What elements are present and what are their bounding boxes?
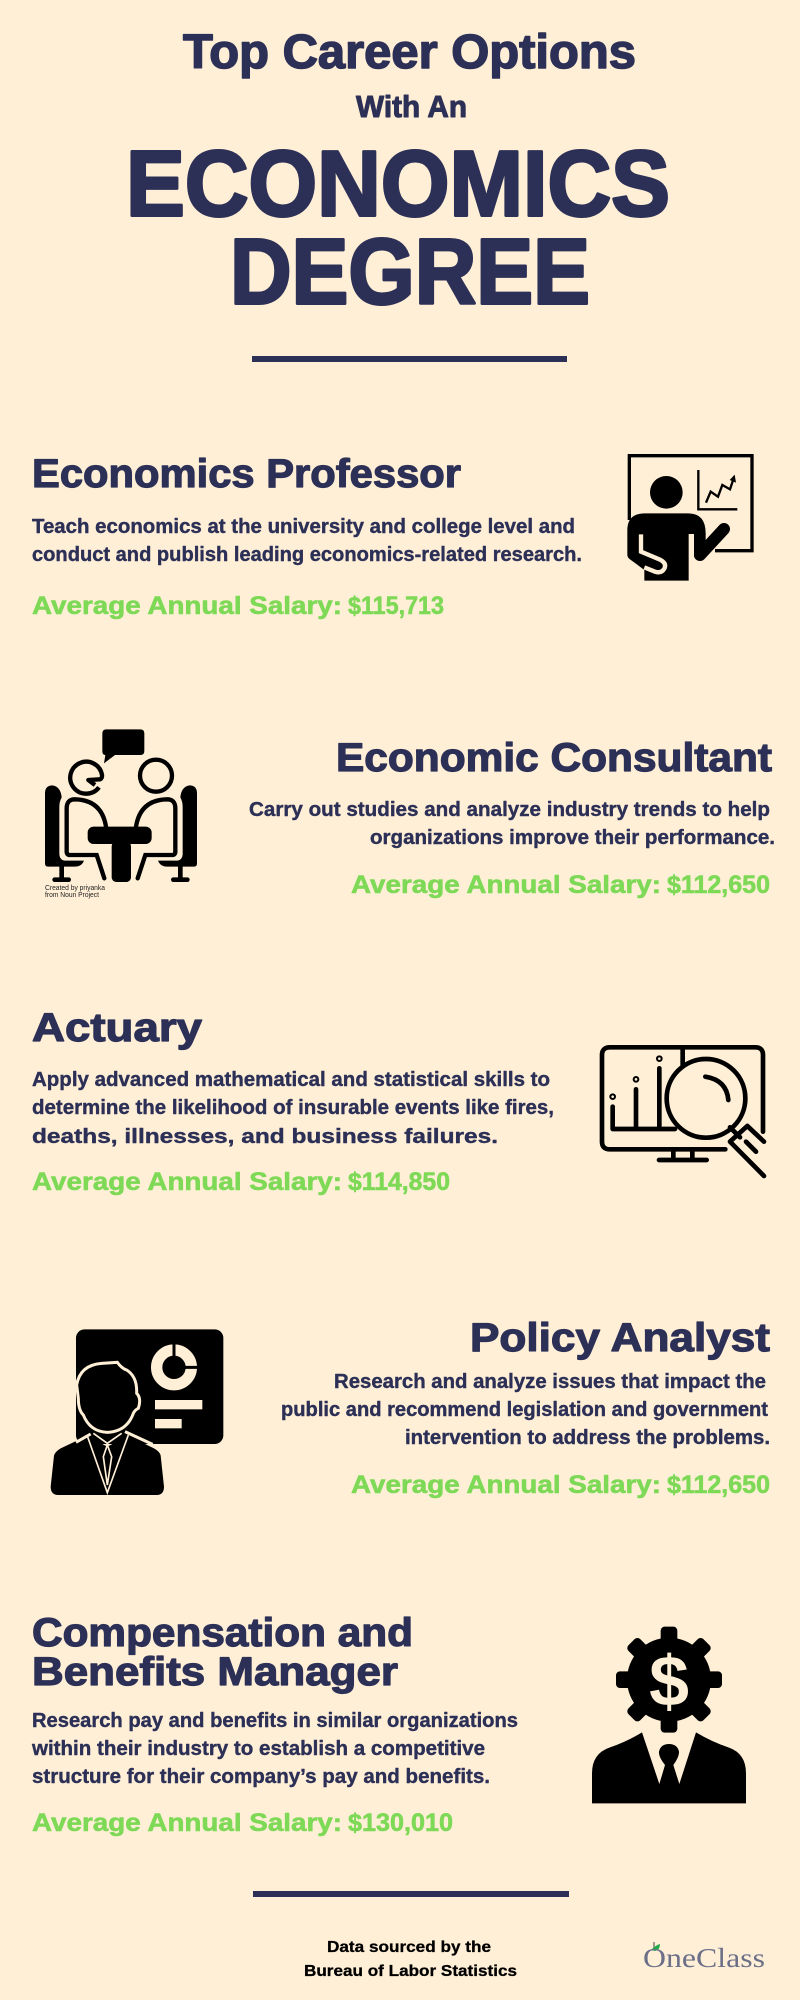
panel: Policy Analyst [51,1316,770,1499]
description: determine the likelihood of insurable events like fires, [32,1097,554,1119]
description: within their industry to establish a competitive [31,1738,485,1760]
panel: Economics Professor [32,452,752,620]
salary [32,1168,450,1196]
title line: ECONOMICS: ECONOMICS [126,132,670,236]
description: conduct and publish leading economics-related research. [32,544,582,566]
panel: Compensation and Benefits Manager [31,1611,746,1837]
heading: Economics Professor [32,452,461,496]
icon: manager with dollar gear head [592,1627,746,1803]
description: structure for their company’s pay and benefits. [32,1766,490,1788]
title line: DEGREE: DEGREE [230,220,590,324]
description [281,1371,770,1449]
title line: With An: With An [356,89,467,124]
heading: Benefits Manager [32,1650,398,1694]
panel: Economic Consultant [45,729,775,899]
salary: $112,650 [667,1471,770,1499]
icon credit: Created by priyanka [45,885,105,892]
description: organizations improve their performance. [370,827,775,849]
salary [32,592,444,620]
title line: Top Career Options: Top Career Options [183,26,636,79]
description: Teach economics at the university and college level and [32,516,575,538]
description: public and recommend legislation and government [281,1399,768,1421]
salary: $130,010 [348,1809,453,1837]
description [32,516,582,566]
salary: Average Annual Salary: [32,1809,342,1837]
icon: two people meeting at a table [45,729,197,882]
panel: Actuary [32,1006,764,1196]
heading: Policy Analyst [470,1316,770,1360]
description: Apply advanced mathematical and statistical skills to [32,1069,550,1091]
heading: Compensation and [32,1611,413,1655]
icon credit: from Noun Project [45,892,99,899]
salary: Average Annual Salary: [351,1471,661,1499]
footer: data source: Bureau of Labor Statistics [304,1963,517,1980]
heading: Economic Consultant [336,736,772,780]
salary: $112,650 [667,871,770,899]
salary [351,1471,770,1499]
icon: analyst with dashboard [51,1329,223,1495]
icon: teacher at chart board [627,456,752,581]
heading: Actuary [32,1006,203,1050]
description [31,1710,518,1788]
icon: monitor chart with magnifying glass [602,1047,764,1176]
footer: data source: Data sourced by the [327,1939,491,1956]
salary: Average Annual Salary: [32,592,342,620]
heading [32,1611,413,1694]
salary: $114,850 [348,1168,450,1196]
description: Carry out studies and analyze industry trends to help [249,799,770,821]
icon: manager with dollar gear head: $ [649,1641,689,1721]
title block [126,26,670,324]
description [32,1069,554,1148]
logo: OneClass: OneClass [643,1943,765,1973]
salary: $115,713 [348,592,444,620]
salary: Average Annual Salary: [351,871,661,899]
description: Research and analyze issues that impact the [334,1371,766,1393]
salary: Average Annual Salary: [32,1168,342,1196]
description: Research pay and benefits in similar organizations [32,1710,518,1732]
footer: data source [304,1939,517,1980]
salary [351,871,770,899]
description: deaths, illnesses, and business failures. [32,1126,498,1148]
icon credit [45,885,105,899]
salary [32,1809,453,1837]
description: intervention to address the problems. [405,1427,770,1449]
description [249,799,775,849]
